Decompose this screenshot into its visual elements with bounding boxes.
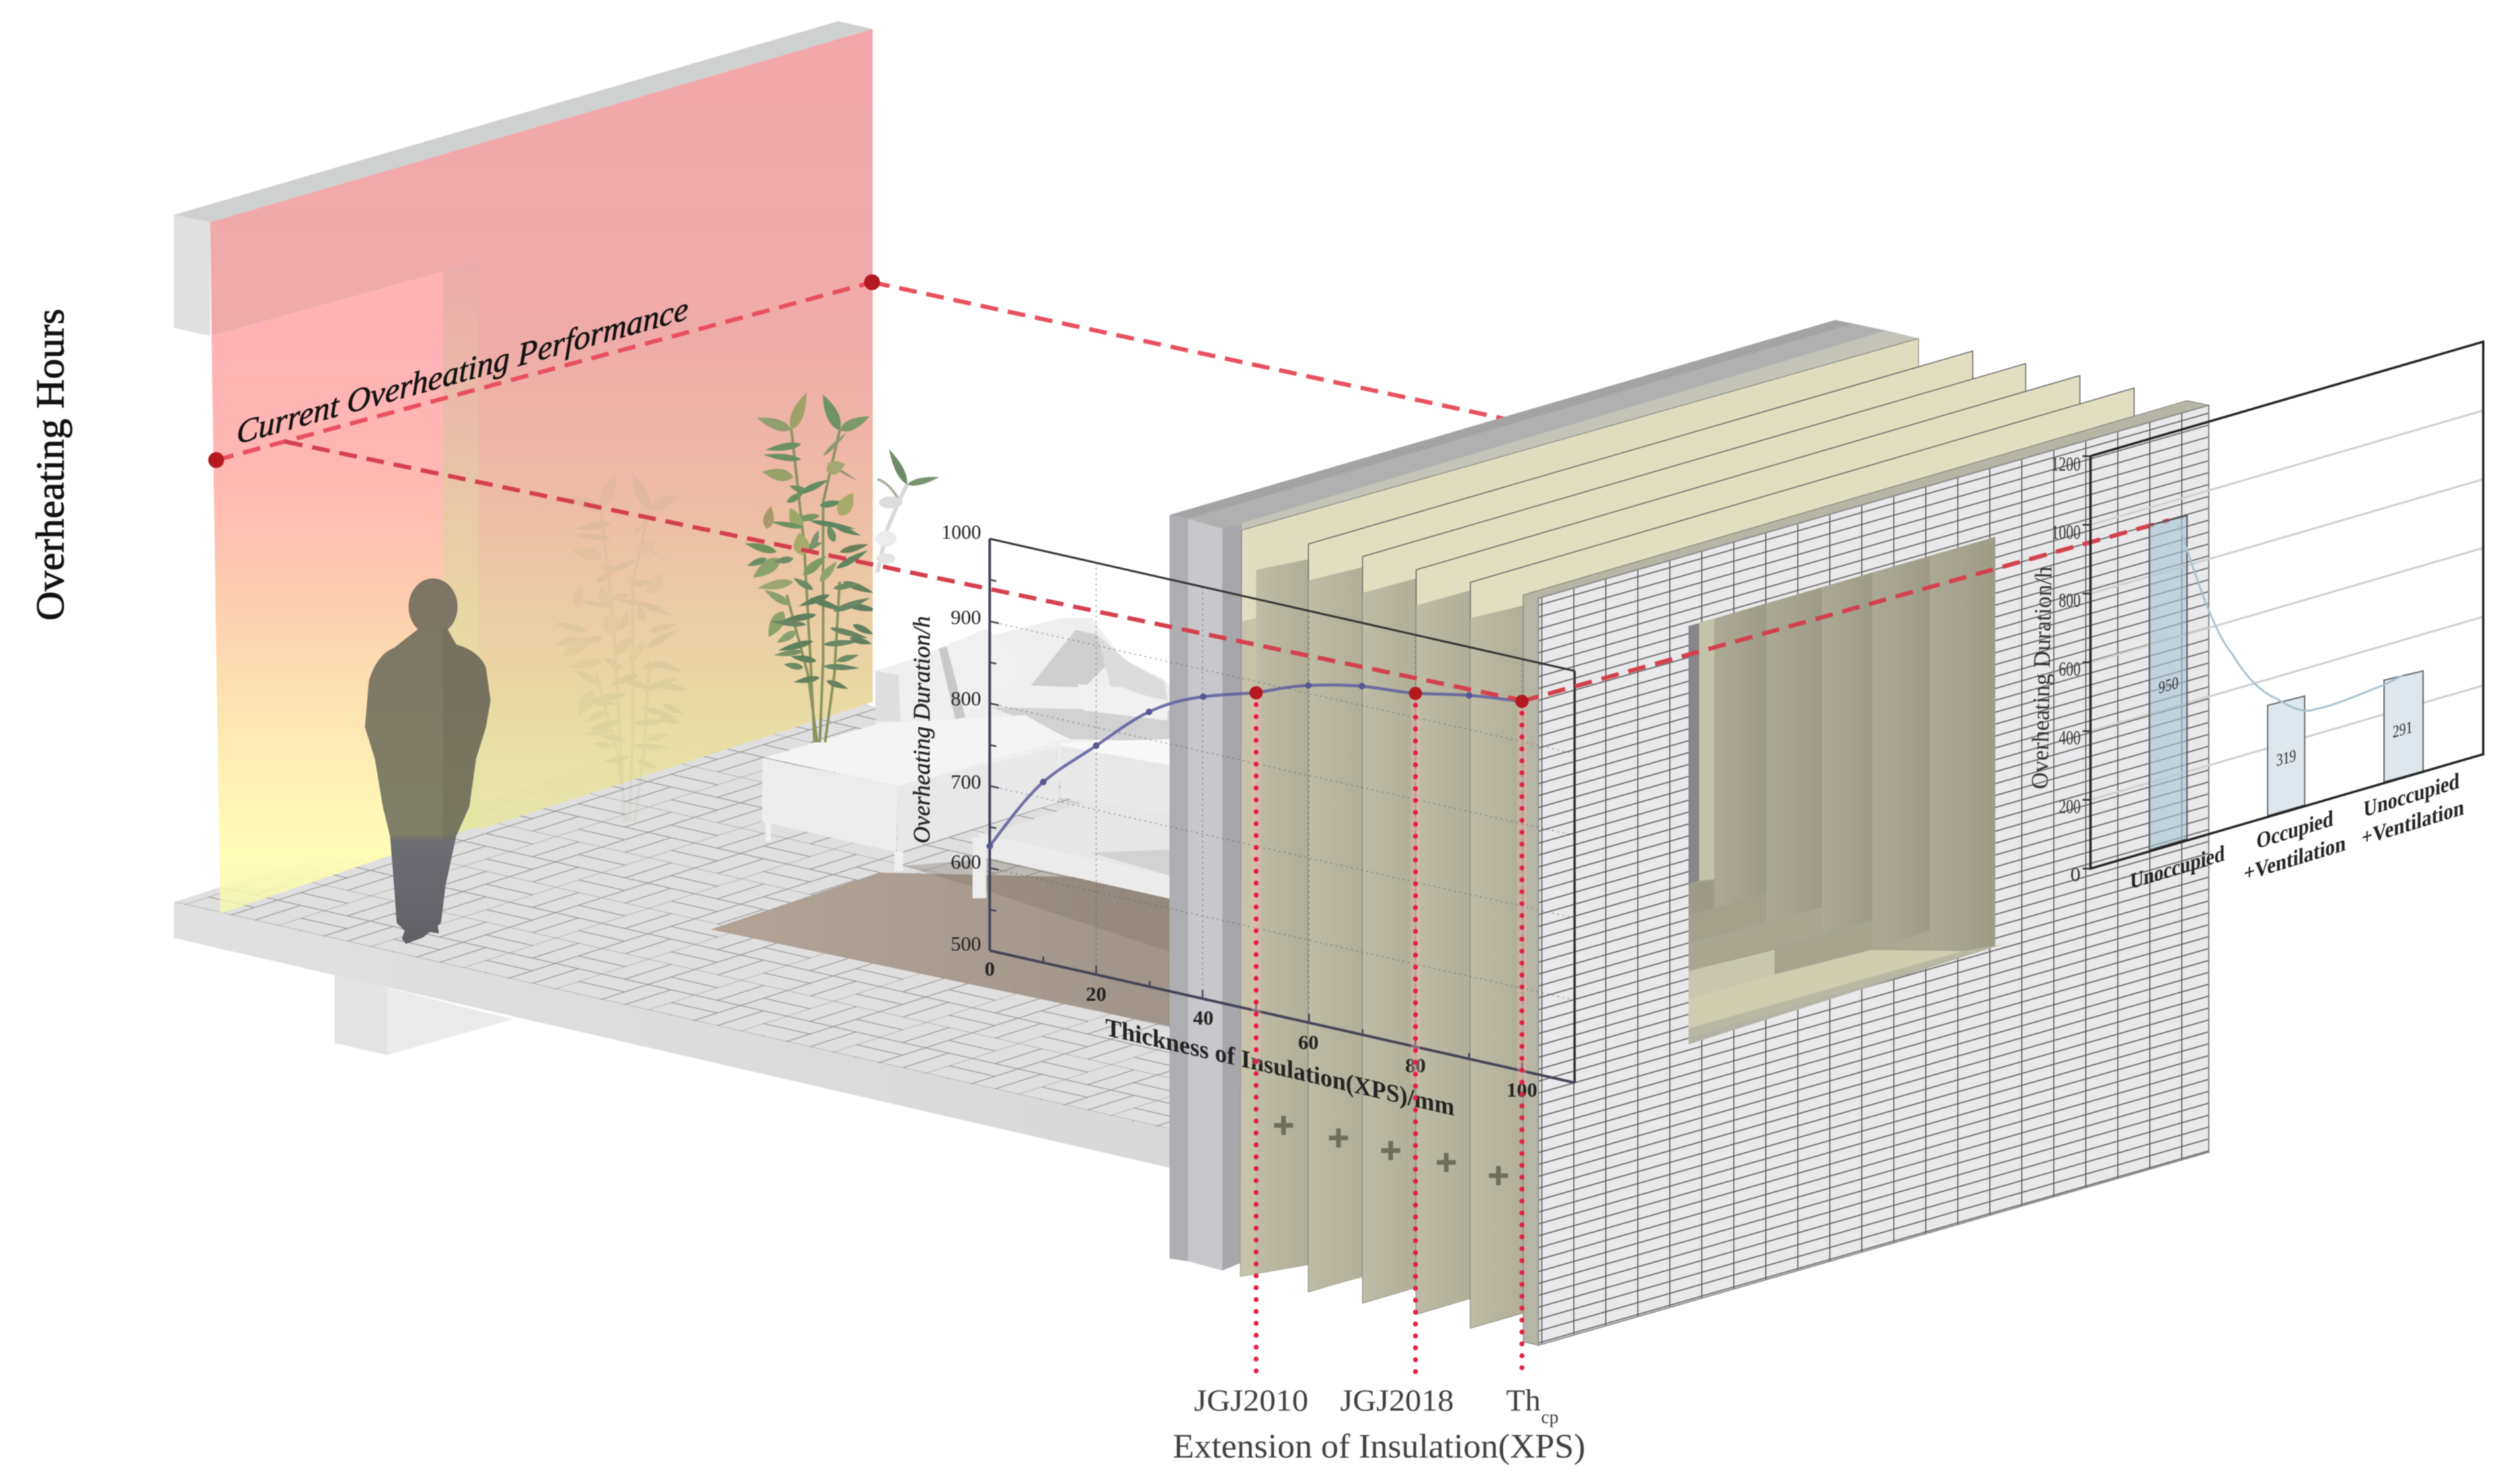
sofa back and arm bbox=[875, 618, 1171, 793]
seat shadow bbox=[992, 707, 1171, 742]
insulation layer 3 bbox=[1363, 364, 2026, 1303]
bar chart y labels: 600 bbox=[2059, 657, 2081, 680]
bar value labels: 319 bbox=[2276, 745, 2296, 770]
throw pillow bbox=[939, 629, 1017, 719]
right seat front bbox=[1060, 746, 1171, 816]
dashed line from wall to critical point bbox=[285, 442, 1517, 699]
label Th cp: cp bbox=[1541, 1407, 1558, 1428]
wall level line bbox=[216, 282, 872, 460]
insulation edge band bbox=[1222, 331, 1919, 530]
plant leaves bbox=[744, 391, 879, 691]
bar 1 bbox=[2149, 516, 2187, 850]
panel: overheating gradient wall bbox=[174, 21, 873, 914]
bar chart y labels bbox=[2051, 452, 2081, 886]
label Th cp: Th bbox=[1506, 1384, 1540, 1418]
bar chart y labels: 200 bbox=[2059, 795, 2081, 818]
chart axes bbox=[990, 539, 1575, 1083]
bar value labels: 291 bbox=[2393, 717, 2412, 742]
bar value labels: 950 bbox=[2159, 672, 2178, 697]
person silhouette bbox=[365, 578, 491, 944]
bar chart y labels: 0 bbox=[2071, 863, 2081, 886]
person head bbox=[409, 578, 458, 635]
plant bbox=[744, 391, 879, 742]
panel: floor slab with tiles bbox=[174, 691, 1171, 1168]
bar chart y labels: 1000 bbox=[2051, 520, 2081, 543]
x axis labels: 40 bbox=[1193, 1006, 1214, 1029]
y axis ticks bbox=[2083, 456, 2091, 869]
bar category labels: Unoccupied bbox=[2364, 767, 2459, 822]
bar chart frame bbox=[2091, 342, 2483, 869]
plus 4 bbox=[1437, 1153, 1456, 1172]
bar category labels: Unoccupied bbox=[2130, 840, 2225, 894]
bar chart y labels: 400 bbox=[2059, 726, 2081, 749]
bar value labels bbox=[2159, 672, 2412, 770]
insulation layer 6 bbox=[1523, 401, 2209, 1345]
plus 1 bbox=[1274, 1116, 1293, 1135]
x axis labels: 20 bbox=[1086, 982, 1107, 1005]
concrete top surface bbox=[1170, 320, 1919, 530]
sofa leg bbox=[973, 838, 986, 898]
insulation layer 5 bbox=[1470, 388, 2134, 1328]
bar category labels: +Ventilation bbox=[2244, 830, 2346, 886]
bar 3 bbox=[2384, 671, 2423, 782]
dashed line from critical point to bar chart bbox=[1521, 520, 2169, 701]
rug shadow under sofa bbox=[903, 859, 1171, 952]
bar 2 bbox=[2268, 696, 2305, 816]
lower seat top bbox=[978, 801, 1171, 876]
concrete top of wall bbox=[174, 21, 873, 222]
insulation layer 4 bbox=[1416, 375, 2080, 1314]
concrete top second band bbox=[1188, 324, 1886, 529]
insulation layer 2 bbox=[1308, 351, 1973, 1292]
labels: insulation standards bbox=[1173, 1384, 1585, 1465]
label Th cp bbox=[1506, 1384, 1558, 1428]
chaise front bbox=[762, 758, 898, 852]
lower seat shadow bbox=[1091, 849, 1171, 876]
window bottom reveal bbox=[1689, 944, 2004, 1044]
floor tile surface bbox=[174, 691, 1171, 1130]
panel: insulation layers bbox=[1240, 338, 2209, 1345]
chart: overheating duration vs thickness of insulation bbox=[908, 520, 1575, 1122]
x axis labels: 100 bbox=[1507, 1078, 1537, 1101]
y axis labels bbox=[941, 520, 981, 955]
x axis labels: 80 bbox=[1406, 1054, 1425, 1077]
slab front edge bbox=[174, 902, 1171, 1168]
bar category labels bbox=[2130, 767, 2464, 894]
curve markers bbox=[986, 682, 1472, 849]
right seat top bbox=[1060, 739, 1171, 765]
bar category labels: +Ventilation bbox=[2362, 794, 2464, 851]
rug bbox=[711, 873, 1171, 1027]
doorway opening gradient bbox=[212, 272, 443, 914]
y axis labels: 700 bbox=[951, 770, 981, 793]
plant ghost above wall edge bbox=[875, 448, 940, 572]
chaise top bbox=[765, 715, 1067, 786]
icons: plus signs between insulation layers bbox=[1274, 1116, 1508, 1185]
chaise side face bbox=[897, 747, 1058, 852]
wall gradient upper and right part bbox=[210, 29, 873, 830]
wall column bbox=[443, 258, 479, 838]
concrete front bbox=[1188, 519, 1222, 1270]
tile grid bbox=[1538, 405, 2209, 1345]
y axis labels: 600 bbox=[951, 850, 981, 873]
shadow behind cushions bbox=[1031, 630, 1111, 687]
y axis labels: 1000 bbox=[941, 520, 981, 543]
lighter cushion bbox=[1078, 684, 1168, 721]
y axis labels: 900 bbox=[951, 605, 981, 629]
label: overheating hours: Overheating Hours bbox=[28, 309, 72, 621]
chaise legs bbox=[766, 822, 903, 871]
bar chart gridlines bbox=[2091, 410, 2483, 800]
x axis labels bbox=[984, 957, 1537, 1101]
plus 5 bbox=[1489, 1166, 1508, 1185]
y axis labels: 500 bbox=[951, 932, 981, 955]
beam under slab bbox=[335, 974, 513, 1055]
bar chart y labels: 1200 bbox=[2051, 452, 2081, 475]
label JGJ2018: JGJ2018 bbox=[1340, 1384, 1454, 1418]
insulation layer 1 bbox=[1240, 338, 1919, 1276]
panel: tile cladding bbox=[1538, 405, 2209, 1345]
window opening bbox=[1689, 537, 2004, 1044]
x axis title: Thickness of Insulation(XPS)/mm bbox=[1105, 1013, 1454, 1122]
window base bbox=[1689, 537, 1995, 1038]
y axis title: Overheating Duration/h bbox=[908, 616, 935, 843]
y axis labels: 800 bbox=[951, 687, 981, 710]
label: current overheating performance: Current Overheating Performance bbox=[237, 290, 688, 452]
dashed line: wall section top to insulation bbox=[216, 282, 1506, 460]
bar category labels: Occupied bbox=[2256, 805, 2333, 854]
label JGJ2010: JGJ2010 bbox=[1194, 1384, 1308, 1418]
bar chart y labels: 800 bbox=[2059, 588, 2081, 611]
x axis labels: 60 bbox=[1298, 1031, 1318, 1054]
trend curve bbox=[2179, 525, 2403, 711]
sofa arm front bbox=[875, 671, 900, 721]
dotted markers bbox=[1256, 693, 1522, 1377]
plus 2 bbox=[1329, 1128, 1348, 1148]
dashed line: curve section through thermal point to bar chart bbox=[285, 442, 2169, 701]
plant shadow on wall bbox=[553, 470, 689, 822]
chart: overheating duration bar chart bbox=[2026, 342, 2483, 894]
inner strips bbox=[1689, 537, 1995, 1027]
bar chart y title: Overheating Duration/h bbox=[2026, 566, 2057, 789]
duration curve bbox=[990, 685, 1521, 846]
plant stems bbox=[787, 430, 840, 742]
chart grid bbox=[990, 563, 1575, 1071]
label extension of insulation: Extension of Insulation(XPS) bbox=[1173, 1428, 1585, 1465]
dotted halo bbox=[1256, 693, 1522, 1084]
concrete side bbox=[1222, 524, 1242, 1270]
plus 3 bbox=[1381, 1141, 1400, 1160]
cushion edge shadow bbox=[1097, 635, 1168, 701]
line to insulation stack bbox=[872, 282, 1506, 419]
person body bbox=[365, 628, 491, 944]
panel: concrete base wall bbox=[1170, 320, 1919, 1270]
key points on wall and curve bbox=[208, 274, 1529, 708]
concrete lintel end bbox=[174, 215, 210, 336]
chart frame bbox=[990, 539, 1575, 1083]
dotted lines: insulation standards bbox=[1256, 693, 1522, 1377]
plaster layer bbox=[1170, 515, 1188, 1261]
lower seat front bbox=[978, 833, 1171, 899]
nested lower steps bbox=[1689, 880, 1995, 1038]
x axis labels: 0 bbox=[984, 957, 995, 980]
furniture: sofa bbox=[762, 618, 1171, 899]
